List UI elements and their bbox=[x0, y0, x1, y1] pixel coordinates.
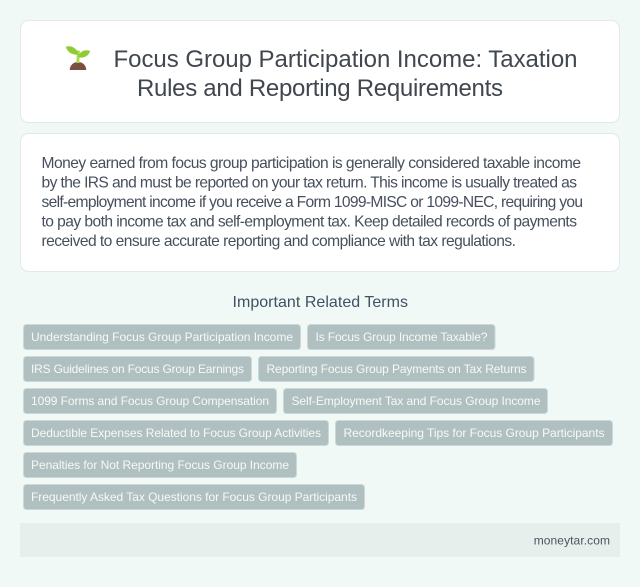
tag: Self-Employment Tax and Focus Group Income bbox=[292, 394, 541, 408]
tag bbox=[308, 324, 495, 350]
tag bbox=[336, 420, 612, 446]
heading: important related terms: Important Related Terms bbox=[232, 294, 408, 311]
tag bbox=[24, 324, 300, 350]
summary text: self-employment income if you receive a Form 1099-MISC or 1099-NEC, requiring you bbox=[42, 194, 583, 211]
title bbox=[114, 46, 578, 102]
tag: Frequently Asked Tax Questions for Focus Group Participants bbox=[31, 490, 357, 504]
panel: related term tags bbox=[24, 324, 612, 510]
tag: Recordkeeping Tips for Focus Group Participants bbox=[344, 426, 604, 440]
tag bbox=[24, 388, 276, 414]
title: Rules and Reporting Requirements bbox=[137, 75, 503, 102]
tag: Deductible Expenses Related to Focus Group Activities bbox=[31, 426, 321, 440]
tag: 1099 Forms and Focus Group Compensation bbox=[31, 394, 269, 408]
tag bbox=[24, 452, 296, 478]
footer bar bbox=[20, 523, 620, 557]
tag bbox=[258, 356, 534, 382]
summary text: to pay both income tax and self-employment tax. Keep detailed records of payments bbox=[42, 213, 577, 230]
summary text: received to ensure accurate reporting and compliance with tax regulations. bbox=[42, 233, 516, 250]
tag: Penalties for Not Reporting Focus Group Income bbox=[31, 458, 289, 472]
tag: Reporting Focus Group Payments on Tax Returns bbox=[266, 362, 526, 376]
icon: sprout bbox=[66, 46, 90, 70]
tag: Understanding Focus Group Participation Income bbox=[31, 330, 293, 344]
summary text bbox=[42, 155, 583, 250]
summary text: Money earned from focus group participation is generally considered taxable income bbox=[42, 155, 581, 172]
tag bbox=[24, 356, 252, 382]
panel: title card bbox=[20, 20, 620, 122]
panel: summary card bbox=[20, 134, 620, 272]
tag: Is Focus Group Income Taxable? bbox=[316, 330, 488, 344]
title: Focus Group Participation Income: Taxation bbox=[114, 46, 578, 73]
tag bbox=[284, 388, 548, 414]
footer source text: moneytar.com bbox=[534, 533, 610, 547]
tag bbox=[24, 420, 328, 446]
tag bbox=[24, 484, 364, 510]
summary text: by the IRS and must be reported on your tax return. This income is usually treated as bbox=[42, 174, 577, 191]
tag: IRS Guidelines on Focus Group Earnings bbox=[31, 362, 244, 376]
